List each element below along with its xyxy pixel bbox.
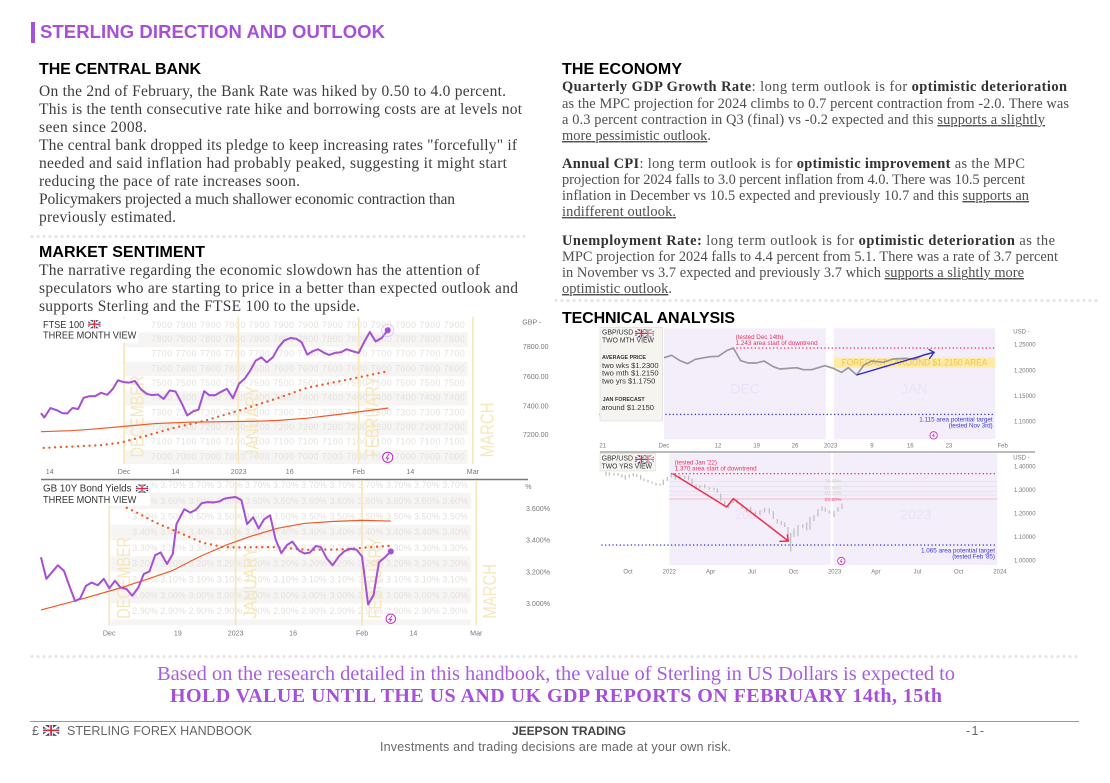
text block: market sentiment	[39, 262, 518, 315]
candlesticks	[606, 472, 842, 552]
axes: 16	[286, 468, 294, 476]
axes: 16	[907, 443, 914, 449]
chart: FTSE 100 three month view: FEBRUARY	[362, 376, 383, 457]
fibonacci levels: 78.60%	[825, 479, 842, 485]
text block: quarterly GDP growth rate: Quarterly GDP Growth Rate: long term outlook is for optimistic deterioration	[562, 79, 1067, 95]
info box: two mth $1.2150	[602, 369, 659, 378]
info box: TWO MTH VIEW	[602, 335, 655, 344]
axes: Mar	[470, 630, 483, 638]
axes: 2023	[231, 468, 247, 476]
axes: 1.30000	[1014, 488, 1036, 494]
chart label	[40, 318, 138, 343]
text block: unemployment rate	[562, 233, 1058, 297]
axes: 1.00000	[1014, 559, 1036, 565]
axes: 2023	[828, 569, 842, 575]
annotations: (tested Nov 3rd)	[949, 422, 993, 429]
info box	[600, 327, 663, 421]
forecast label: FORECAST - AROUND $1.2150 AREA	[842, 358, 987, 368]
axes: 2023	[824, 443, 838, 449]
chart: GB 10Y bond yields three month view: 3.30% 3.30% 3.30% 3.30% 3.30% 3.30% 3.30% 3.30% 3.30% 3.30% 3.30% 3.30%	[132, 543, 468, 553]
axes	[599, 330, 1036, 449]
axes: 7600.00	[523, 373, 549, 381]
text block: central bank: previously estimated.	[39, 209, 176, 226]
axes: Jul	[913, 569, 921, 575]
axes: 9	[870, 443, 874, 449]
axes: 7400.00	[523, 402, 549, 410]
event marker	[838, 557, 845, 565]
chart: GBP/USD two year view: 2023	[900, 506, 932, 522]
chart: GB 10Y bond yields three month view: 3.60% 3.60% 3.60% 3.60% 3.60% 3.60% 3.60% 3.60% 3.60% 3.60% 3.60% 3.60%	[132, 496, 468, 506]
axes: Feb	[997, 443, 1008, 449]
info box: TWO YRS VIEW	[602, 461, 653, 470]
axes: 23	[946, 443, 953, 449]
axes	[623, 456, 1036, 575]
event marker	[930, 432, 937, 439]
fibonacci levels	[669, 479, 997, 503]
axes: Mar	[467, 468, 480, 476]
footer: STERLING FOREX HANDBOOK	[67, 724, 253, 738]
text block: central bank: reducing the pace of rate increases soon.	[39, 173, 300, 190]
heading: the central bank: THE CENTRAL BANK	[39, 61, 201, 78]
event marker	[383, 452, 393, 462]
price line	[664, 348, 935, 375]
chart: GB 10Y bond yields three month view: 2.90% 2.90% 2.90% 2.90% 2.90% 2.90% 2.90% 2.90% 2.90% 2.90% 2.90% 2.90%	[132, 606, 468, 616]
axes: Dec	[103, 630, 116, 638]
moving average line	[41, 520, 391, 610]
axes: 19	[174, 630, 182, 638]
axes: Oct	[954, 569, 964, 575]
event marker	[386, 614, 396, 623]
chart: GBP/USD two year view: 2022	[734, 506, 766, 522]
support line	[600, 412, 995, 417]
chart: FTSE 100 three month view: 7400 7400 7400 7400 7400 7400 7400 7400 7400 7400 7400 7400 7400	[151, 393, 465, 403]
annotations: (tested Jan '22)	[675, 459, 717, 466]
axes: Oct	[789, 569, 798, 575]
downtrend arrow	[673, 474, 788, 541]
FTSE price line	[41, 330, 388, 417]
axes: 2023	[228, 630, 244, 638]
annotations	[675, 459, 995, 561]
fibonacci levels: 50.00%	[825, 491, 842, 497]
support line	[602, 543, 997, 547]
footer: -1-	[966, 724, 984, 738]
axes: 3.200%	[526, 568, 551, 576]
annotations: 1.065 area potential target	[921, 548, 995, 555]
text block: quarterly GDP growth rate	[562, 79, 1069, 144]
chart: GBP/USD two month view: DEC	[730, 380, 760, 396]
text block: unemployment rate: optimistic outlook.	[562, 281, 672, 297]
chart: GB 10Y bond yields three month view: 3.20% 3.20% 3.20% 3.20% 3.20% 3.20% 3.20% 3.20% 3.20% 3.20% 3.20% 3.20%	[132, 559, 468, 569]
chart: FTSE 100 three month view: 7300 7300 7300 7300 7300 7300 7300 7300 7300 7300 7300 7300 7300	[151, 407, 465, 417]
axes: Apr	[871, 569, 881, 575]
axes: 7200.00	[523, 431, 549, 439]
axes: 1.10000	[1014, 535, 1036, 541]
chart: GB 10Y bond yields three month view: DECEMBER	[113, 537, 134, 619]
info box: two wks $1.2300	[602, 361, 659, 370]
conclusion callout: Based on the research detailed in this handbook, the value of Sterling in US Dollars is expected to	[157, 663, 955, 685]
text block: annual CPI: Annual CPI: long term outlook is for optimistic improvement as the MPC	[562, 156, 1025, 172]
text block: central bank: This is the tenth consecutive rate hike and borrowing costs are at levels not	[39, 101, 523, 118]
axes: GBP -	[522, 319, 542, 327]
resistance line	[733, 346, 995, 350]
chart: GB 10Y bond yields three month view: 3.50% 3.50% 3.50% 3.50% 3.50% 3.50% 3.50% 3.50% 3.50% 3.50% 3.50% 3.50%	[132, 511, 468, 521]
chart: FTSE 100 three month view: JANUARY	[242, 386, 263, 457]
axes: 14	[406, 468, 414, 476]
heading: market sentiment: MARKET SENTIMENT	[39, 244, 205, 261]
forecast arrow	[857, 349, 934, 375]
axes: Oct	[623, 569, 633, 575]
chart: FTSE 100 three month view: 7800 7800 7800 7800 7800 7800 7800 7800 7800 7800 7800 7800 7800	[151, 334, 465, 344]
axes: Feb	[353, 468, 365, 476]
footer	[32, 724, 984, 754]
conclusion callout	[157, 663, 955, 707]
axes: USD -	[1013, 456, 1030, 462]
chart: GB 10Y bond yields three month view: JANUARY	[239, 547, 260, 619]
text block: market sentiment: The narrative regarding the economic slowdown has the attention of	[39, 262, 481, 279]
axes: Jul	[748, 569, 756, 575]
text block: annual CPI: inflation in December vs 10.5 expected and previously 10.7 and this supports an	[562, 188, 1029, 204]
yield line	[41, 497, 391, 605]
chart: GB 10Y bond yields three month view: 3.40% 3.40% 3.40% 3.40% 3.40% 3.40% 3.40% 3.40% 3.40% 3.40% 3.40% 3.40%	[132, 527, 468, 537]
chart label: THREE MONTH VIEW	[43, 495, 137, 506]
chart: GB 10Y bond yields three month view: FEBRUARY	[364, 538, 385, 619]
axes: 1.20000	[1014, 368, 1036, 374]
axes: 2024	[993, 569, 1007, 575]
heading: technical analysis: TECHNICAL ANALYSIS	[562, 310, 735, 327]
footer: Investments and trading decisions are made at your own risk.	[380, 740, 731, 754]
annotations: 1.243 area start of downtrend	[736, 340, 818, 347]
chart: GBP/USD two year view	[600, 453, 1036, 575]
text block: central bank: On the 2nd of February, the Bank Rate was hiked by 0.50 to 4.0 percent.	[39, 83, 506, 100]
text block: central bank: Policymakers projected a much shallower economic contraction than	[39, 191, 455, 208]
text block: unemployment rate: in November vs 3.7 expected and previously 3.7 which supports a slightly more	[562, 265, 1024, 281]
info box: JAN FORECAST	[603, 397, 645, 403]
chart: FTSE 100 three month view: 7000 7000 7000 7000 7000 7000 7000 7000 7000 7000 7000 7000 7000	[151, 451, 465, 461]
axes: USD -	[1013, 330, 1030, 336]
chart: GB 10Y bond yields three month view: 3.10% 3.10% 3.10% 3.10% 3.10% 3.10% 3.10% 3.10% 3.10% 3.10% 3.10% 3.10%	[132, 575, 468, 585]
chart: FTSE 100 three month view: 7500 7500 7500 7500 7500 7500 7500 7500 7500 7500 7500 7500 7500	[151, 378, 465, 388]
footer: £	[32, 724, 39, 738]
axes: 26	[792, 443, 799, 449]
footer: JEEPSON TRADING	[512, 724, 626, 738]
axes: 3.600%	[526, 505, 551, 513]
text block: unemployment rate: MPC projection for 2024 falls to 4.4 percent from 5.1. There was a rate of 3.7 percent	[562, 249, 1058, 265]
axes: 3.000%	[526, 600, 551, 608]
text block: central bank: seen since 2008.	[39, 119, 147, 136]
axes: 1.25000	[1014, 343, 1036, 349]
chart: GBP/USD two month view	[599, 327, 1036, 449]
chart: FTSE 100 three month view: DECEMBER	[127, 376, 148, 457]
text block: quarterly GDP growth rate: more pessimistic outlook.	[562, 128, 711, 144]
chart: FTSE 100 three month view: 7200 7200 7200 7200 7200 7200 7200 7200 7200 7200 7200 7200 7200	[151, 422, 465, 432]
axes: Dec	[118, 468, 131, 476]
chart: GBP/USD two month view: JAN	[901, 380, 928, 396]
axes: 21	[599, 443, 607, 449]
chart: GB 10Y bond yields three month view: 3.70% 3.70% 3.70% 3.70% 3.70% 3.70% 3.70% 3.70% 3.70% 3.70% 3.70% 3.70%	[132, 480, 468, 490]
chart: FTSE 100 three month view: MARCH	[477, 403, 498, 457]
fibonacci levels: 23.60%	[825, 497, 842, 503]
chart: FTSE 100 three month view: 7600 7600 7600 7600 7600 7600 7600 7600 7600 7600 7600 7600 7600	[151, 364, 465, 374]
chart: FTSE 100 three month view: 7700 7700 7700 7700 7700 7700 7700 7700 7700 7700 7700 7700 7700	[151, 349, 465, 359]
text block: central bank: The central bank dropped its pledge to keep increasing rates "forcefully" if	[39, 137, 518, 154]
text block: quarterly GDP growth rate: as the MPC projection for 2024 climbs to 0.7 percent contraction from -2.0. There was	[562, 96, 1069, 112]
annotations: 1.370 area start of downtrend	[675, 466, 757, 473]
chart: GB 10Y bond yields three month view: 3.00% 3.00% 3.00% 3.00% 3.00% 3.00% 3.00% 3.00% 3.00% 3.00% 3.00% 3.00%	[132, 590, 468, 600]
text block: central bank: needed and said inflation had probably peaked, suggesting it might start	[39, 155, 508, 172]
info box: GBP/USD	[602, 454, 633, 463]
axes	[46, 319, 549, 476]
text block: central bank	[39, 83, 523, 226]
resistance line	[672, 471, 997, 476]
axes	[103, 483, 551, 638]
conclusion callout: HOLD VALUE UNTIL THE US AND UK GDP REPORTS ON FEBRUARY 14th, 15th	[170, 685, 942, 707]
info box: GBP/USD	[602, 328, 634, 337]
axes: 14	[409, 630, 417, 638]
info box	[600, 453, 655, 471]
text block: annual CPI: projection for 2024 falls to 3.0 percent inflation from 4.0. There was 10.5 percent	[562, 172, 1025, 188]
axes: Dec	[659, 443, 669, 449]
chart label	[41, 482, 150, 506]
axes: 1.10000	[1014, 420, 1036, 426]
chart: FTSE 100 three month view	[40, 317, 549, 476]
text block: market sentiment: supports Sterling and the FTSE 100 to the upside.	[39, 298, 360, 315]
axes: 3.400%	[526, 536, 551, 544]
axes: 7800.00	[523, 343, 549, 351]
heading: the economy: THE ECONOMY	[562, 61, 682, 78]
chart label: GB 10Y Bond Yields	[43, 484, 132, 495]
title: STERLING DIRECTION AND OUTLOOK	[40, 21, 386, 42]
axes: 14	[46, 468, 54, 476]
chart label: FTSE 100	[43, 320, 85, 331]
dotted trend line	[44, 371, 388, 448]
axes: 12	[715, 443, 722, 449]
text block: annual CPI	[562, 156, 1029, 220]
axes: 19	[753, 443, 761, 449]
dotted trend line	[127, 508, 391, 550]
chart: FTSE 100 three month view: 7100 7100 7100 7100 7100 7100 7100 7100 7100 7100 7100 7100 7100	[151, 437, 465, 447]
moving average line	[41, 408, 388, 432]
axes: 1.20000	[1014, 512, 1036, 518]
axes: Feb	[356, 630, 368, 638]
annotations: (tested Dec 14th)	[736, 334, 783, 341]
axes: %	[525, 483, 532, 491]
text block: annual CPI: indifferent outlook.	[562, 204, 676, 220]
info box: two yrs $1.1750	[602, 376, 655, 385]
annotations	[736, 334, 993, 429]
text block: unemployment rate: Unemployment Rate: long term outlook is for optimistic deterioration as the	[562, 233, 1055, 249]
axes: 2022	[663, 569, 677, 575]
text block: market sentiment: speculators who are starting to price in a better than expected outlook and	[39, 280, 518, 297]
info box: around $1.2150	[601, 403, 654, 412]
axes: 14	[172, 468, 179, 476]
chart: FTSE 100 three month view: 7900 7900 7900 7900 7900 7900 7900 7900 7900 7900 7900 7900 7900	[151, 320, 465, 330]
axes: 1.15000	[1014, 394, 1036, 400]
axes: Apr	[706, 569, 715, 575]
chart: GB 10Y bond yields three month view	[41, 480, 551, 638]
text block: quarterly GDP growth rate: a 0.3 percent contraction in Q3 (final) vs -0.2 expected and this supports a slightly	[562, 112, 1046, 128]
axes: 16	[289, 630, 297, 638]
info box: AVERAGE PRICE	[602, 355, 646, 361]
annotations: (tested Feb '85)	[952, 554, 995, 561]
fibonacci levels: 61.80%	[825, 485, 842, 491]
chart label: THREE MONTH VIEW	[43, 330, 137, 341]
chart: GB 10Y bond yields three month view: MARCH	[479, 564, 500, 619]
annotations: 1.115 area potential target	[919, 416, 993, 423]
axes: 1.40000	[1014, 465, 1036, 471]
